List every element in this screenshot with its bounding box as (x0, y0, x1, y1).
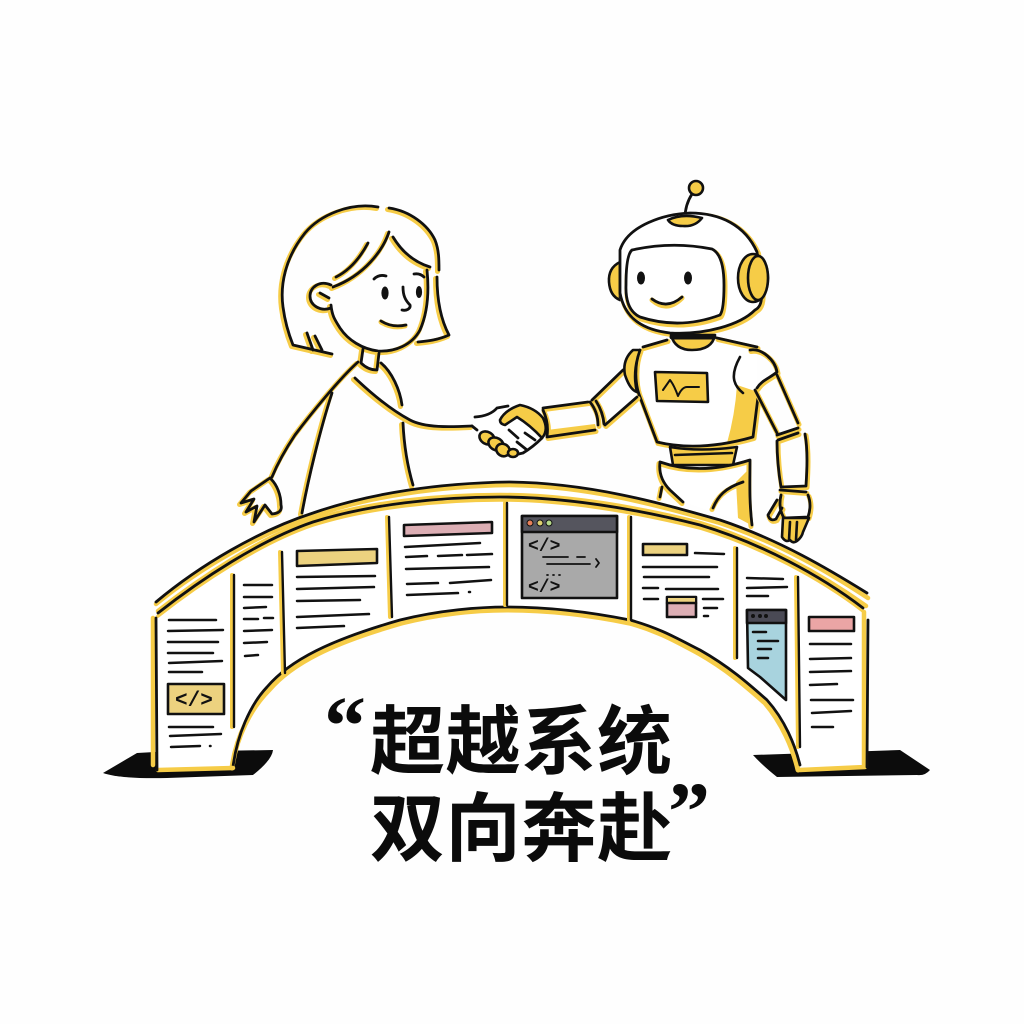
robot neck (671, 335, 715, 350)
title (324, 680, 710, 871)
bridge body (156, 482, 868, 770)
code text: </> (528, 537, 560, 557)
hand outlines (472, 406, 542, 456)
robot right ear (738, 254, 768, 302)
closing quote: ” (668, 766, 710, 859)
panel 4: document with pink header (404, 522, 492, 595)
ground shadow right (753, 750, 930, 777)
ground shadow left (103, 750, 273, 778)
robot waist (670, 447, 737, 465)
robot wave (663, 380, 699, 396)
robot left ear (609, 262, 620, 300)
window dots (527, 520, 552, 526)
robot chest panel (655, 372, 708, 402)
robot hand fingers (782, 518, 809, 542)
woman eyes (381, 286, 422, 300)
opening quote: “ (324, 680, 366, 773)
panel 5: code window (522, 516, 617, 598)
robot screen (626, 245, 725, 325)
blue window title bar (747, 610, 786, 623)
robot left shoulder (624, 350, 640, 392)
illustration: robot (543, 181, 811, 542)
handshake (472, 405, 546, 459)
robot head (620, 213, 763, 335)
title line 2: 双向奔赴 (370, 787, 672, 871)
woman face (308, 270, 428, 353)
panel 7: blue window (747, 578, 787, 700)
robot face (637, 272, 692, 306)
panel 3: document with yellow header (297, 549, 377, 628)
robot head cap (668, 216, 702, 226)
panel dividers (232, 503, 800, 747)
bridge arch and legs (153, 607, 868, 770)
woman left hand (240, 478, 281, 524)
yellow fingers (477, 429, 518, 459)
yellow hand (500, 405, 546, 438)
panel 2: text lines (244, 585, 273, 656)
illustration: woman (240, 206, 472, 523)
robot right arm (734, 350, 811, 542)
woman body (270, 349, 472, 514)
robot antenna (685, 181, 703, 218)
panel 8: document with red header (809, 617, 854, 727)
robot hips and leg (659, 460, 752, 526)
window title bar (522, 516, 617, 532)
white hand (475, 406, 542, 456)
bridge top rail (156, 482, 868, 616)
small card (667, 597, 696, 617)
panel 5: code window: </> (528, 578, 560, 598)
robot torso (635, 335, 759, 448)
woman hair (281, 206, 449, 356)
panel 6: document with small card (643, 544, 724, 617)
panel 1: document with code block (168, 620, 224, 747)
title line 1: 超越系统 (370, 700, 672, 784)
code block: </> (175, 690, 213, 713)
woman expression (374, 274, 424, 327)
bridge (153, 482, 868, 770)
robot extended arm (543, 350, 640, 438)
blue window dots (751, 614, 768, 618)
